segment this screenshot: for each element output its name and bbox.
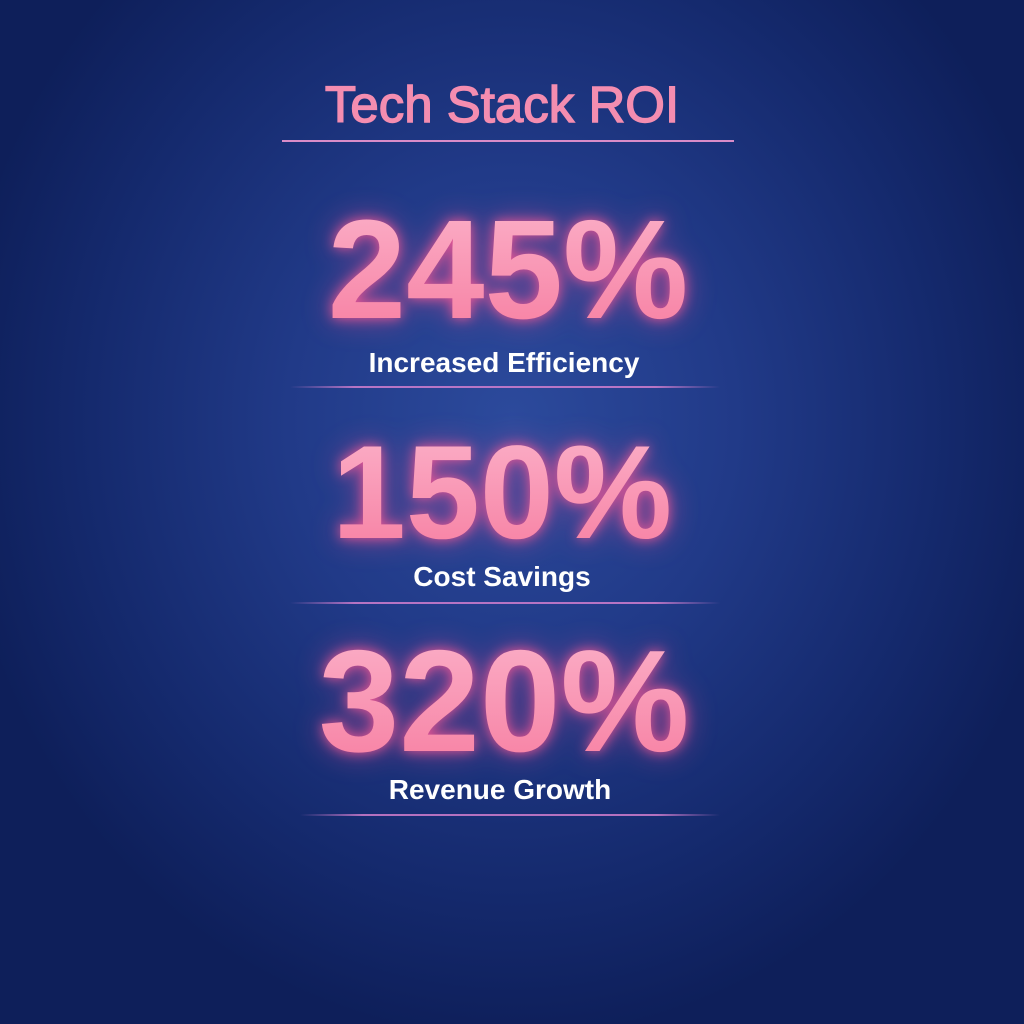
stat: 150%: 150%: [332, 419, 672, 567]
stat: 320%: 320%: [319, 620, 689, 782]
stat: 150%: [0, 427, 1014, 560]
label: increased efficiency: Increased Efficiency: [369, 347, 639, 378]
stat: 320%: [0, 629, 1016, 774]
stat: 245%: [0, 199, 1020, 340]
label: cost savings: Cost Savings: [413, 561, 591, 592]
stat: 245%: 245%: [328, 190, 688, 348]
label: revenue growth: Revenue Growth: [389, 774, 611, 805]
title: Tech Stack ROI: [325, 76, 679, 133]
